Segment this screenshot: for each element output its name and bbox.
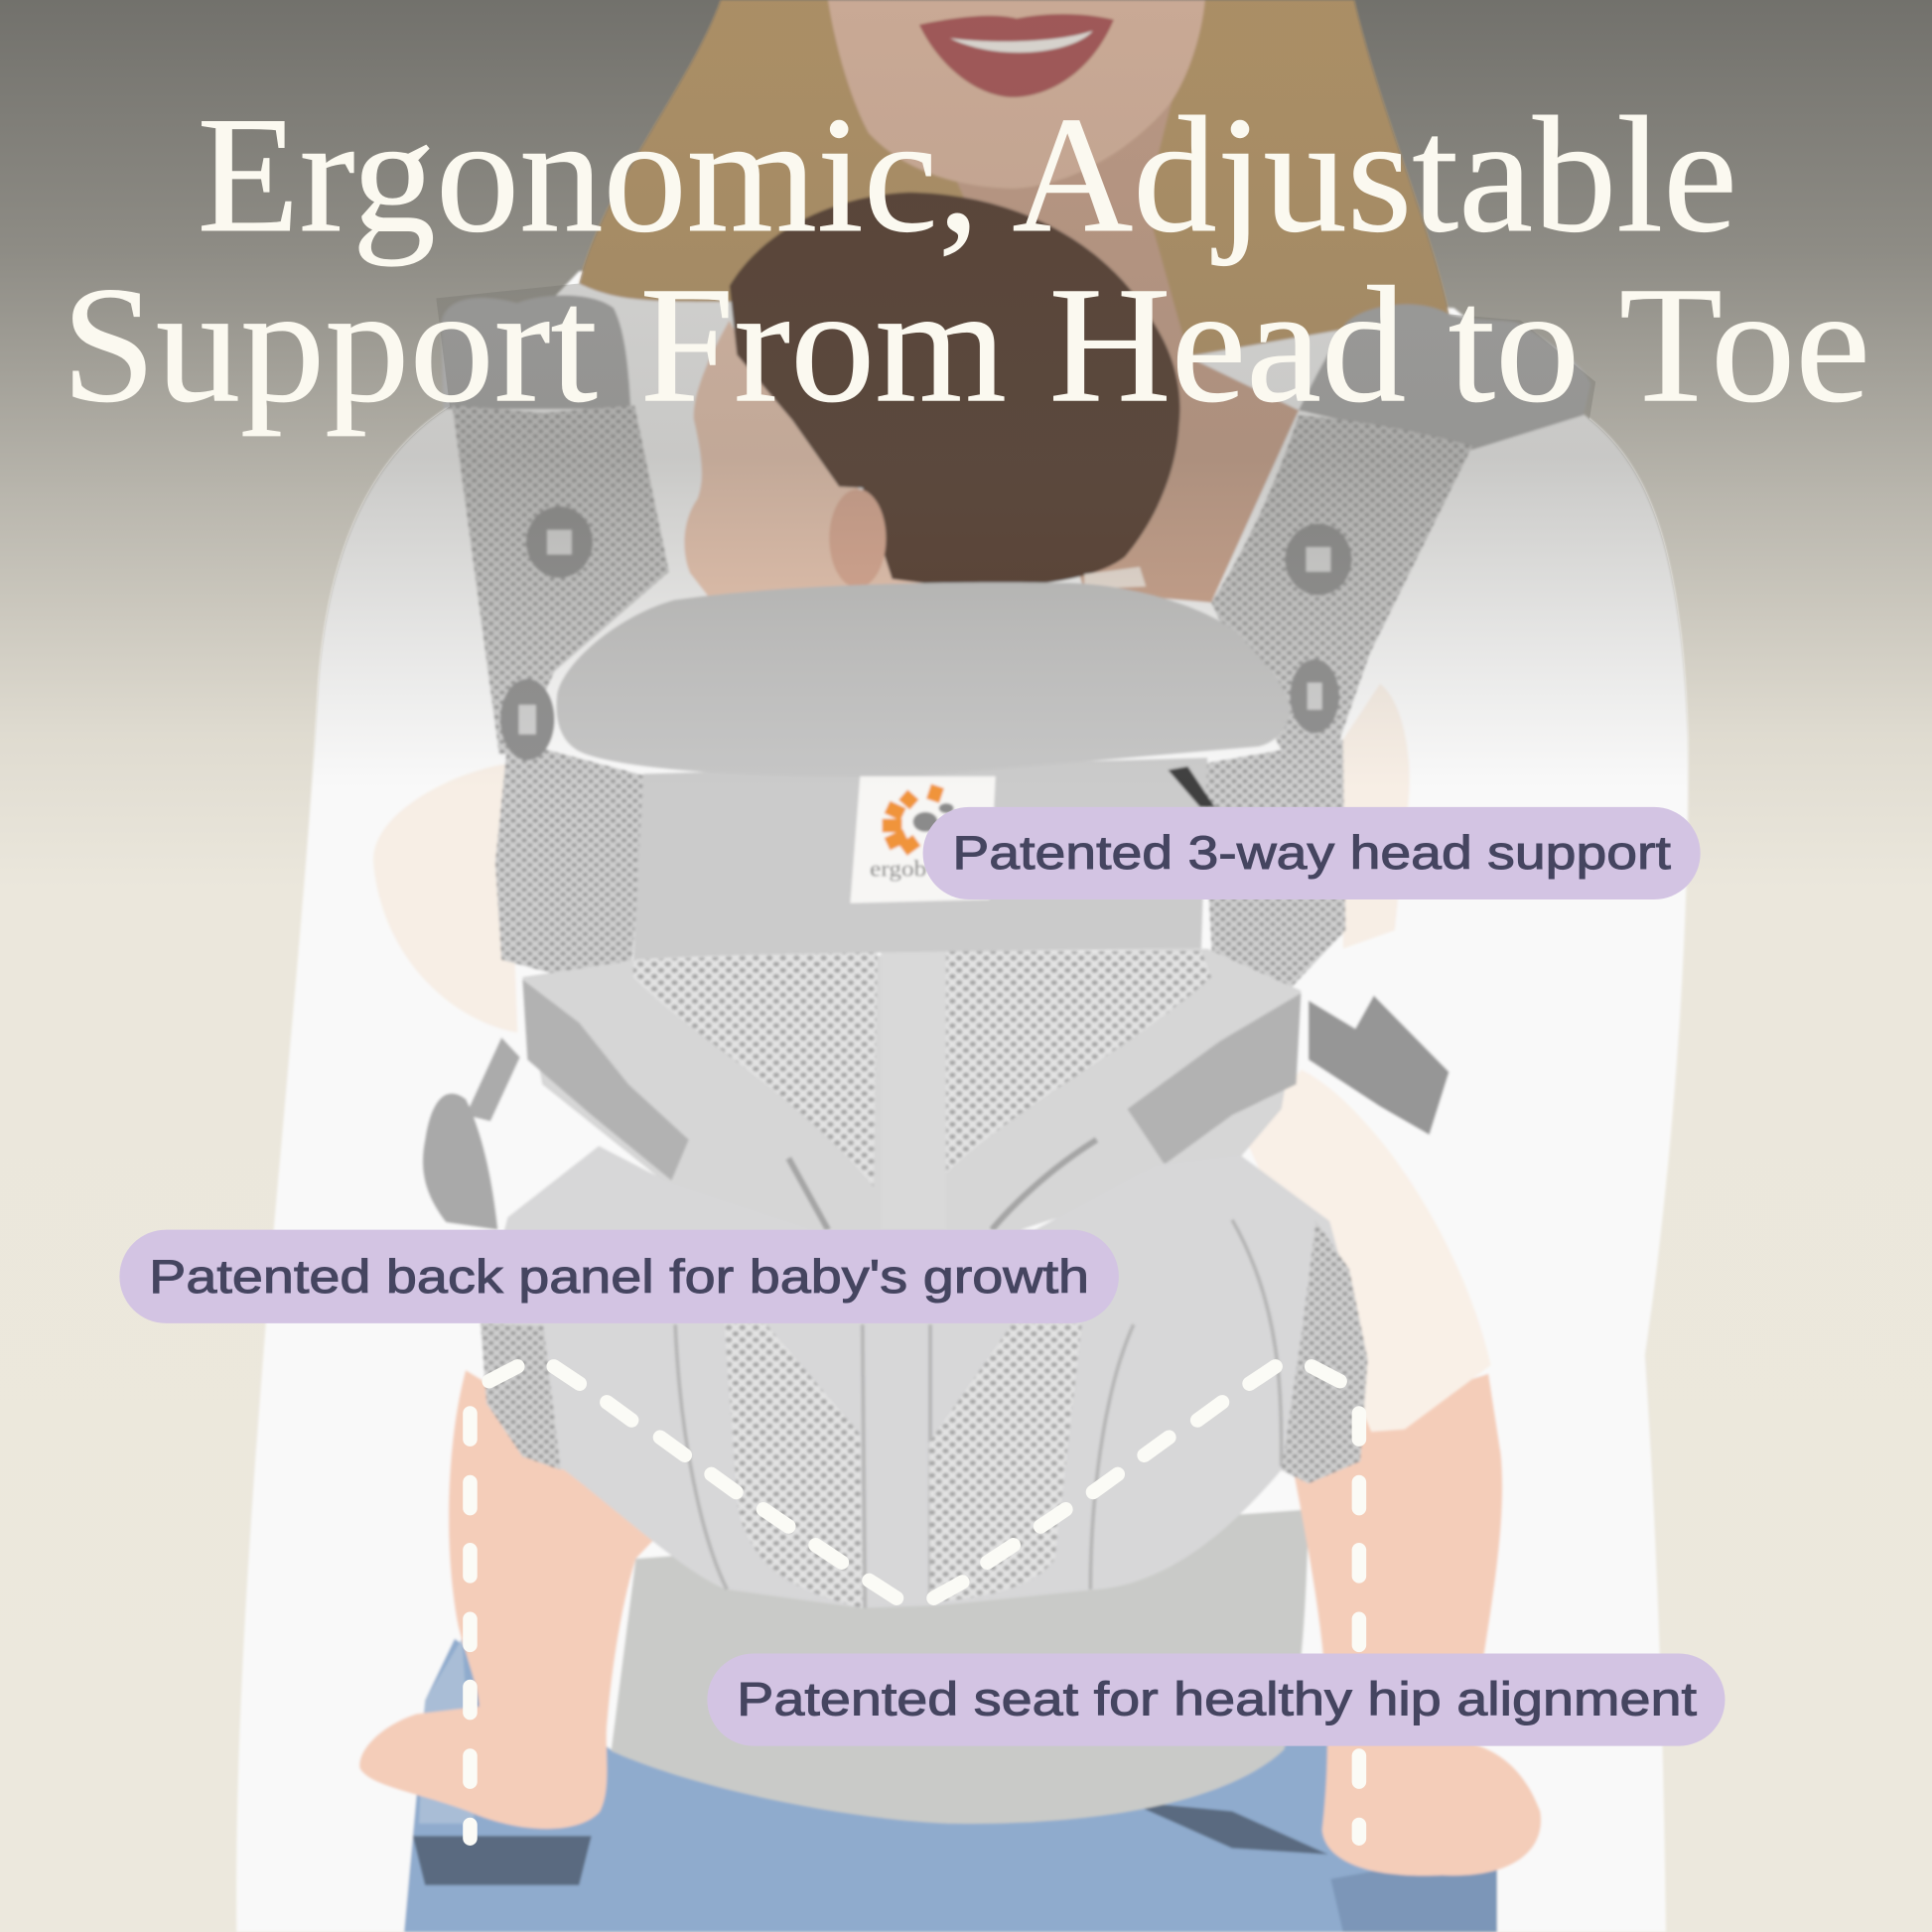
- icon: orange sun logo: [883, 786, 937, 850]
- left shoulder strap mesh: [452, 405, 669, 755]
- jeans: [404, 1639, 1497, 1932]
- right buckle group: [992, 993, 1302, 1230]
- head support pad: [556, 583, 1290, 776]
- carrier waist belt: [612, 1509, 1309, 1824]
- right side mesh: [1201, 740, 1345, 998]
- carrier seat body: [481, 1146, 1368, 1608]
- baby right leg and foot: [1294, 1374, 1541, 1875]
- right leg opening mesh: [1282, 1221, 1368, 1483]
- muslin cloth upper right: [1343, 684, 1410, 949]
- title: Ergonomic, Adjustable: [198, 83, 1737, 267]
- title: [62, 83, 1870, 437]
- left side strap tail: [423, 1037, 520, 1230]
- lips and smile: [919, 14, 1114, 97]
- muslin cloth left: [373, 763, 517, 1033]
- baby left leg and foot: [359, 1370, 665, 1829]
- left side mesh: [495, 740, 647, 1009]
- seat shadow folds: [675, 1220, 1282, 1608]
- neck and chest: [936, 101, 1299, 603]
- carrier middle body: [522, 949, 1302, 1282]
- top shade overlay on person: [317, 0, 1687, 727]
- lower left mesh panel: [725, 1323, 863, 1608]
- brand label: [850, 776, 996, 903]
- left buckle group: [522, 980, 828, 1230]
- upper right mesh panel: [942, 951, 1211, 1176]
- photo: parent wearing baby carrier: [236, 0, 1688, 1932]
- callout: back panel: Patented back panel for baby's growth: [149, 1250, 1089, 1303]
- callout: head support: Patented 3-way head support: [952, 826, 1671, 879]
- lower right mesh panel: [929, 1323, 1082, 1601]
- hair: [579, 0, 1449, 357]
- callout: seat: Patented seat for healthy hip alignment: [737, 1673, 1697, 1725]
- callout: head support: [923, 807, 1701, 899]
- left leg opening mesh: [481, 1323, 561, 1470]
- right side strap tail: [1309, 996, 1449, 1135]
- baby face: [684, 321, 961, 602]
- muslin cloth lower right: [1246, 1069, 1491, 1432]
- right shoulder strap top pad: [1299, 305, 1590, 450]
- carrier head panel: [633, 758, 1207, 960]
- left shoulder strap top pad: [441, 296, 630, 409]
- white collar: [1084, 567, 1146, 589]
- right shoulder strap mesh: [1211, 415, 1472, 763]
- callout: back panel: [119, 1230, 1119, 1323]
- parent white shirt and arms: [236, 271, 1688, 1932]
- title: Support From Head to Toe: [62, 253, 1870, 437]
- face: [828, 0, 1205, 189]
- callout: seat: [707, 1654, 1725, 1746]
- baby ear: [829, 489, 886, 588]
- dashed outline: healthy hip alignment M shape: [470, 1366, 1359, 1839]
- strap adjustment buttons: [500, 506, 1351, 760]
- baby hair: [730, 193, 1180, 587]
- central stitched strip: [881, 949, 946, 1318]
- zipper: [1169, 766, 1215, 807]
- upper left mesh panel: [633, 951, 878, 1186]
- brand label text: ergob: [870, 856, 926, 882]
